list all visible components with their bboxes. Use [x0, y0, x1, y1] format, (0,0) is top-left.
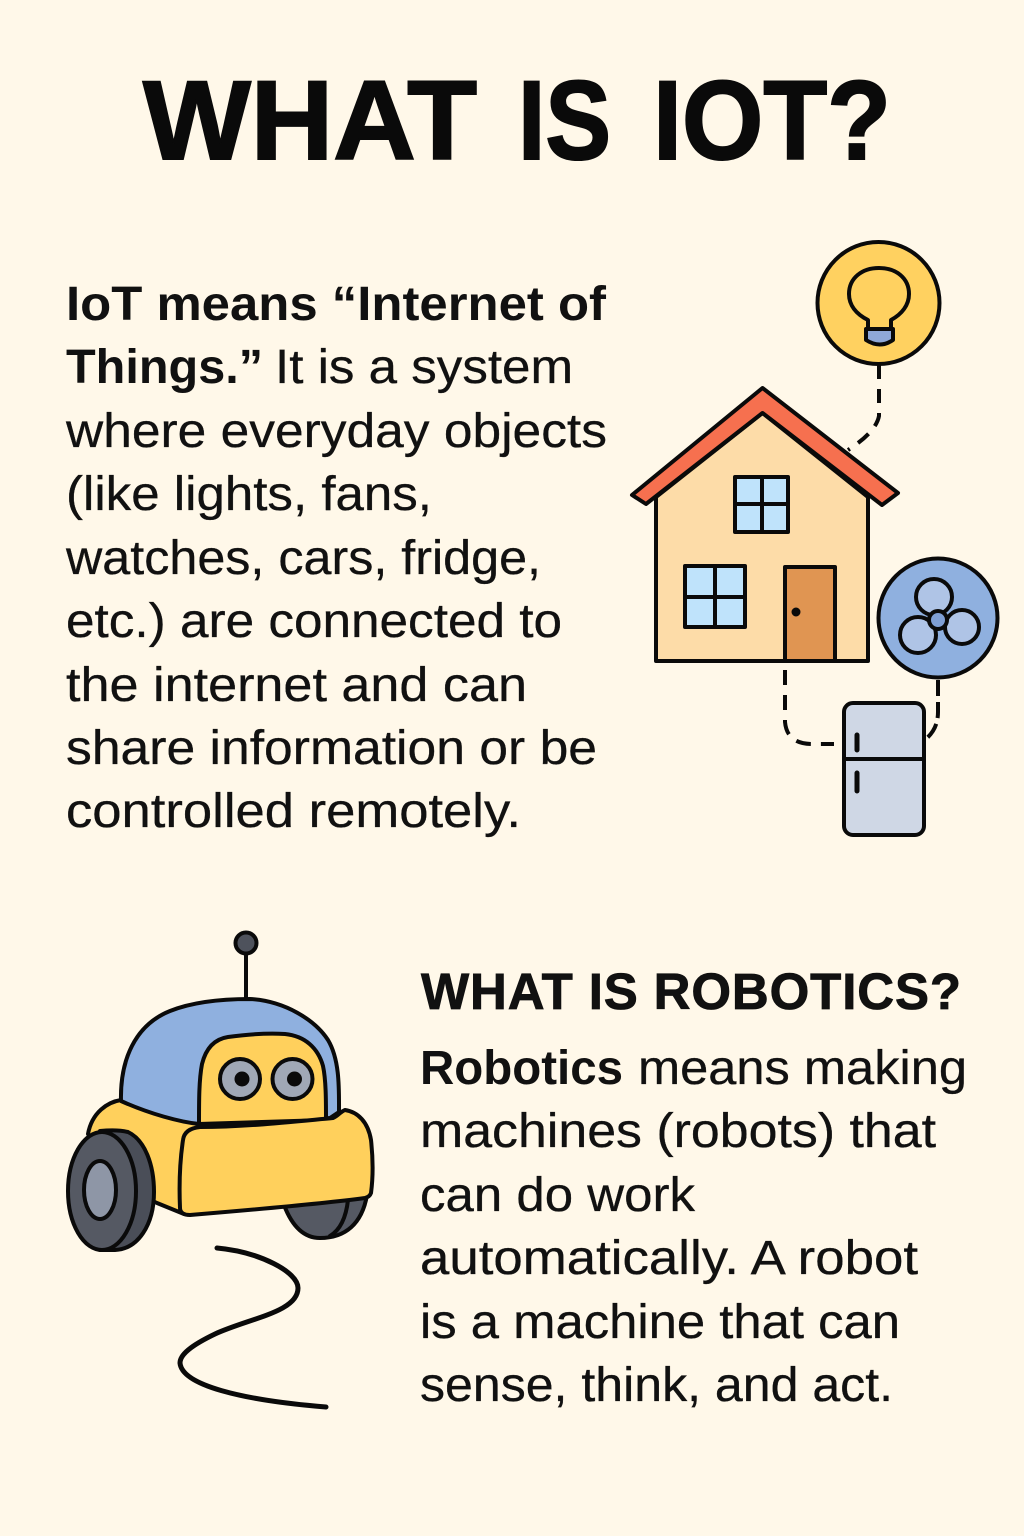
illustration: connected smart home [632, 242, 998, 835]
text block: IoT definition: share information or be [66, 722, 597, 775]
text block: robotics definition: sense, think, and act. [420, 1359, 893, 1412]
text block: IoT definition: where everyday objects [65, 405, 607, 458]
text block: robotics definition [420, 1042, 967, 1412]
text block: IoT definition [65, 278, 607, 838]
icon: house [632, 388, 898, 661]
upper window [735, 477, 788, 532]
text block: IoT definition: IoT means “Internet of [66, 278, 607, 331]
text block: IoT definition: the internet and can [66, 659, 527, 712]
robot path line [180, 1248, 326, 1407]
robot dome [121, 999, 339, 1124]
text block: IoT definition: (like lights, fans, [66, 468, 432, 521]
text block: IoT definition: watches, cars, fridge, [65, 532, 541, 585]
robot body rear [88, 1100, 200, 1214]
text block: IoT definition: etc.) are connected to [66, 595, 562, 648]
text block: robotics definition: automatically. A robot [420, 1232, 918, 1285]
left eye [220, 1059, 260, 1099]
text block: IoT definition: It is a system [275, 341, 573, 394]
title: IOT? [653, 58, 891, 183]
icon: fan [878, 558, 998, 678]
robot face [199, 1034, 326, 1124]
left wheel [68, 1130, 154, 1250]
antenna [236, 932, 256, 1001]
right eye [272, 1059, 312, 1099]
text block: robotics definition: machines (robots) that [420, 1105, 936, 1158]
text block: IoT definition: controlled remotely. [66, 785, 521, 838]
right wheel [284, 1195, 367, 1238]
dashed connector: house to fridge [785, 670, 834, 744]
title [143, 58, 891, 183]
text block: robotics definition: Robotics [420, 1042, 623, 1095]
robot front bumper [180, 1110, 372, 1215]
dashed connector: bulb to house [848, 365, 879, 450]
text block: robotics definition: is a machine that can [420, 1296, 900, 1349]
title: WHAT [143, 58, 477, 183]
heading: what is robotics: WHAT IS ROBOTICS? [421, 963, 961, 1020]
door [785, 567, 835, 661]
icon: light bulb [818, 242, 940, 364]
dashed connector: fan to fridge [927, 680, 938, 738]
title: IS [518, 58, 611, 183]
text block: robotics definition: can do work [420, 1169, 696, 1222]
lower window [685, 566, 745, 627]
illustration: robot car [68, 932, 372, 1250]
roof [632, 388, 898, 505]
text block: robotics definition: means making [638, 1042, 967, 1095]
text block: IoT definition: Things.” [66, 341, 263, 394]
icon: fridge [844, 703, 924, 835]
